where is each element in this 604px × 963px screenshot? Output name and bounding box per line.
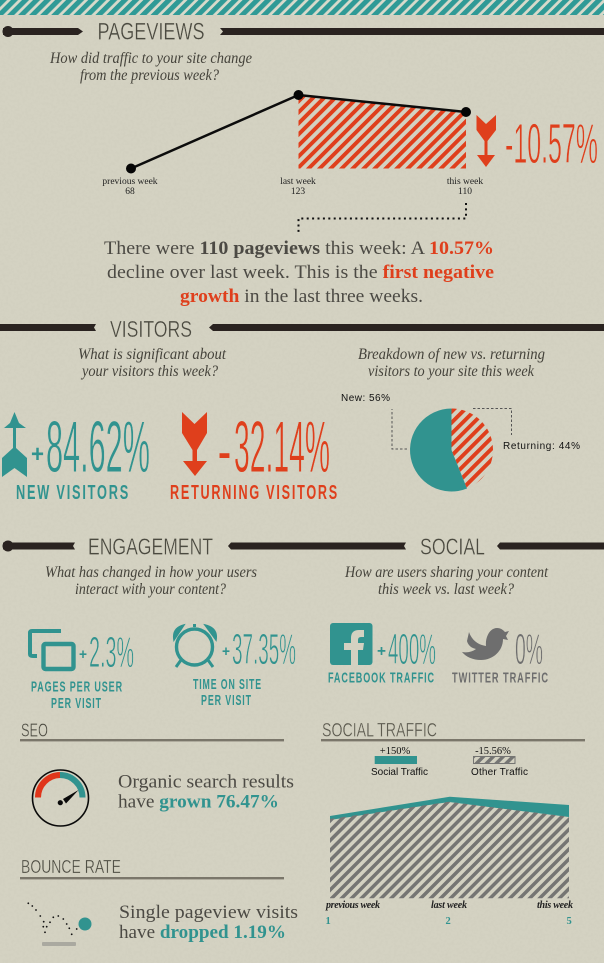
question: significant: your visitors this week? xyxy=(80,363,218,380)
stat: new visitors xyxy=(16,407,150,504)
panel: visitors: 84.62% xyxy=(46,407,150,488)
question: traffic change xyxy=(49,50,252,84)
stat: pages per user: PER VISIT xyxy=(51,695,102,712)
panel: visitors: 32.14% xyxy=(234,407,330,488)
legend: other traffic: Other Traffic xyxy=(471,767,528,778)
heading: engagement xyxy=(2,534,213,560)
panel: social traffic xyxy=(321,720,585,927)
stat: returning visitors xyxy=(170,407,339,504)
panel: social xyxy=(228,534,604,686)
question: significant: What is significant about xyxy=(78,346,227,363)
legend: social traffic: +150% xyxy=(380,746,410,757)
heading: social: SOCIAL xyxy=(420,534,485,560)
line chart: pageviews: 68 xyxy=(125,187,135,197)
panel: bounce rate xyxy=(20,857,298,946)
icon: teal up arrow xyxy=(2,412,27,477)
stat: twitter traffic: 0% xyxy=(515,625,543,674)
stat: returning visitors: - xyxy=(218,431,231,475)
area chart: traffic: last week xyxy=(431,900,467,911)
summary text: There were 110 pageviews this week: A 10.57% xyxy=(104,238,494,259)
question: breakdown: Breakdown of new vs. returning xyxy=(358,346,545,363)
area chart: traffic: 5 xyxy=(566,916,572,927)
text: organic search: have grown 76.47% xyxy=(118,792,279,812)
question: social: this week vs. last week? xyxy=(378,581,514,598)
stat: pages per user: PAGES PER USER xyxy=(31,678,123,696)
question: engagement: What has changed in how your users xyxy=(45,564,257,581)
summary text xyxy=(104,238,494,307)
panel: pageviews xyxy=(2,18,604,307)
question: breakdown xyxy=(358,346,545,380)
question: significant xyxy=(78,346,227,380)
heading: bounce rate: BOUNCE RATE xyxy=(21,857,121,877)
icon: twitter bird xyxy=(462,628,509,660)
panel: visitors xyxy=(0,316,604,504)
icon: gauge xyxy=(32,770,88,826)
question: traffic change: from the previous week? xyxy=(80,67,219,84)
line chart: pageviews: previous week xyxy=(102,177,158,187)
stat: pages per user: + xyxy=(79,646,87,663)
question: social: How are users sharing your content xyxy=(344,564,548,581)
icon: facebook xyxy=(330,623,372,665)
text: single pageview: Single pageview visits xyxy=(119,902,298,923)
line chart: pageviews: 110 xyxy=(458,187,472,197)
area chart: traffic xyxy=(325,797,573,927)
stat: returning visitors: RETURNING VISITORS xyxy=(170,482,339,504)
text: organic search xyxy=(118,772,294,812)
stat: facebook traffic: FACEBOOK TRAFFIC xyxy=(328,670,435,686)
stat: time on site: PER VISIT xyxy=(201,692,252,709)
question: engagement xyxy=(45,564,257,598)
area chart: traffic: 2 xyxy=(446,916,451,927)
question: social xyxy=(344,564,548,598)
legend: social traffic: Social Traffic xyxy=(371,767,428,778)
heading: seo: SEO xyxy=(21,720,48,740)
text: single pageview xyxy=(119,902,298,943)
text: 37.35% xyxy=(232,625,296,674)
area chart: traffic: this week xyxy=(537,900,573,911)
panel: engagement xyxy=(2,534,296,712)
heading: engagement: ENGAGEMENT xyxy=(88,534,213,560)
stat: twitter traffic xyxy=(452,625,549,686)
text: organic search: Organic search results xyxy=(118,772,294,792)
heading: visitors xyxy=(0,316,604,342)
heading: pageviews: PAGEVIEWS xyxy=(98,18,204,46)
heading: social traffic: SOCIAL TRAFFIC xyxy=(322,720,437,742)
question: traffic change: How did traffic to your site change xyxy=(49,50,252,67)
line chart: pageviews: 123 xyxy=(291,187,305,197)
question: engagement: interact with your content? xyxy=(75,581,226,598)
line chart: pageviews: this week xyxy=(447,177,483,187)
stat: time on site: + xyxy=(222,643,230,660)
line chart: pageviews: last week xyxy=(280,177,316,187)
panel: seo xyxy=(20,720,294,826)
heading: pageviews xyxy=(2,18,604,46)
text: single pageview: have dropped 1.19% xyxy=(119,922,286,943)
area chart: traffic: previous week xyxy=(325,900,380,911)
top striped band xyxy=(0,0,604,15)
heading: social xyxy=(228,534,604,560)
icon: red down arrow xyxy=(182,412,207,476)
stat: pages per user xyxy=(31,628,134,712)
stat: time on site xyxy=(193,625,296,709)
heading: visitors: VISITORS xyxy=(110,316,192,342)
stat: new visitors: NEW VISITORS xyxy=(16,482,130,504)
question: breakdown: visitors to your site this week xyxy=(368,363,535,380)
icon: red down arrow xyxy=(476,115,496,167)
icon: alarm clock xyxy=(174,624,216,667)
area chart: traffic: 1 xyxy=(326,916,331,927)
summary text: decline over last week. This is the first negative xyxy=(107,262,494,283)
stat: time on site: TIME ON SITE xyxy=(193,676,262,693)
line chart: pageviews xyxy=(102,90,483,197)
icon: bouncing ball xyxy=(27,902,91,946)
stat: new visitors: + xyxy=(31,441,44,468)
stat: facebook traffic xyxy=(328,625,436,686)
pie chart: new vs returning xyxy=(341,393,580,492)
stat: facebook traffic: + xyxy=(377,643,386,660)
legend: social traffic xyxy=(371,746,428,778)
legend: other traffic xyxy=(471,746,528,778)
pie chart: new vs returning: New: 56% xyxy=(341,393,390,404)
summary text: growth in the last three weeks. xyxy=(180,286,423,307)
panel: engagement: 2.3% xyxy=(89,628,134,677)
pie chart: new vs returning: Returning: 44% xyxy=(503,441,580,452)
dotted connector xyxy=(298,203,466,233)
panel: social: 400% xyxy=(388,625,436,674)
icon: pages xyxy=(30,631,74,669)
legend: other traffic: -15.56% xyxy=(475,746,511,757)
